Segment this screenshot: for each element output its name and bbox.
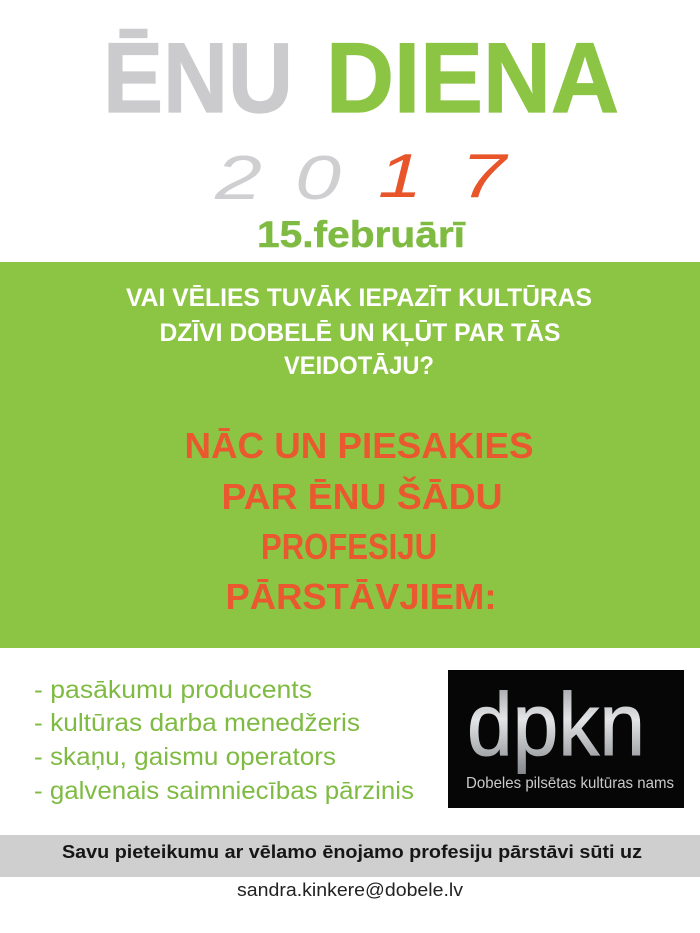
profession list: - skaņu, gaismu operators: [34, 743, 336, 771]
orange headline: PAR ĒNU ŠĀDU: [222, 475, 502, 517]
intro question: DZĪVI DOBELĒ UN KĻŪT PAR TĀS: [160, 319, 560, 347]
intro question: [126, 284, 592, 380]
intro question: VEIDOTĀJU?: [284, 352, 434, 380]
intro question: VAI VĒLIES TUVĀK IEPAZĪT KULTŪRAS: [126, 284, 592, 312]
submission band: Savu pieteikumu ar vēlamo ēnojamo profesiju pārstāvi sūti uz: [62, 842, 642, 862]
orange headline: [184, 425, 534, 617]
title: ĒNU: [103, 22, 293, 133]
date: 15.februārī: [257, 214, 466, 255]
profession list: - kultūras darba menedžeris: [34, 709, 360, 737]
orange headline: NĀC UN PIESAKIES: [184, 425, 534, 466]
profession list: [34, 676, 414, 805]
panel: green call to action: [0, 262, 700, 648]
contact email: sandra.kinkere@dobele.lv: [237, 880, 463, 900]
year 2017: [214, 142, 509, 213]
logo: dpkn: [448, 670, 684, 808]
year 2017: 2: [214, 144, 262, 213]
title: [103, 22, 619, 133]
profession list: - galvenais saimniecības pārzinis: [34, 777, 414, 805]
year 2017: 0: [295, 144, 341, 213]
year 2017: 7: [461, 142, 509, 211]
logo: dpkn: dpkn: [467, 674, 645, 774]
logo: dpkn: Dobeles pilsētas kultūras nams: [466, 775, 674, 792]
profession list: - pasākumu producents: [34, 676, 312, 704]
orange headline: PROFESIJU: [261, 526, 437, 567]
title: DIENA: [326, 22, 619, 133]
orange headline: PĀRSTĀVJIEM:: [226, 576, 496, 617]
submission band: [0, 835, 700, 877]
year 2017: 1: [378, 142, 422, 211]
